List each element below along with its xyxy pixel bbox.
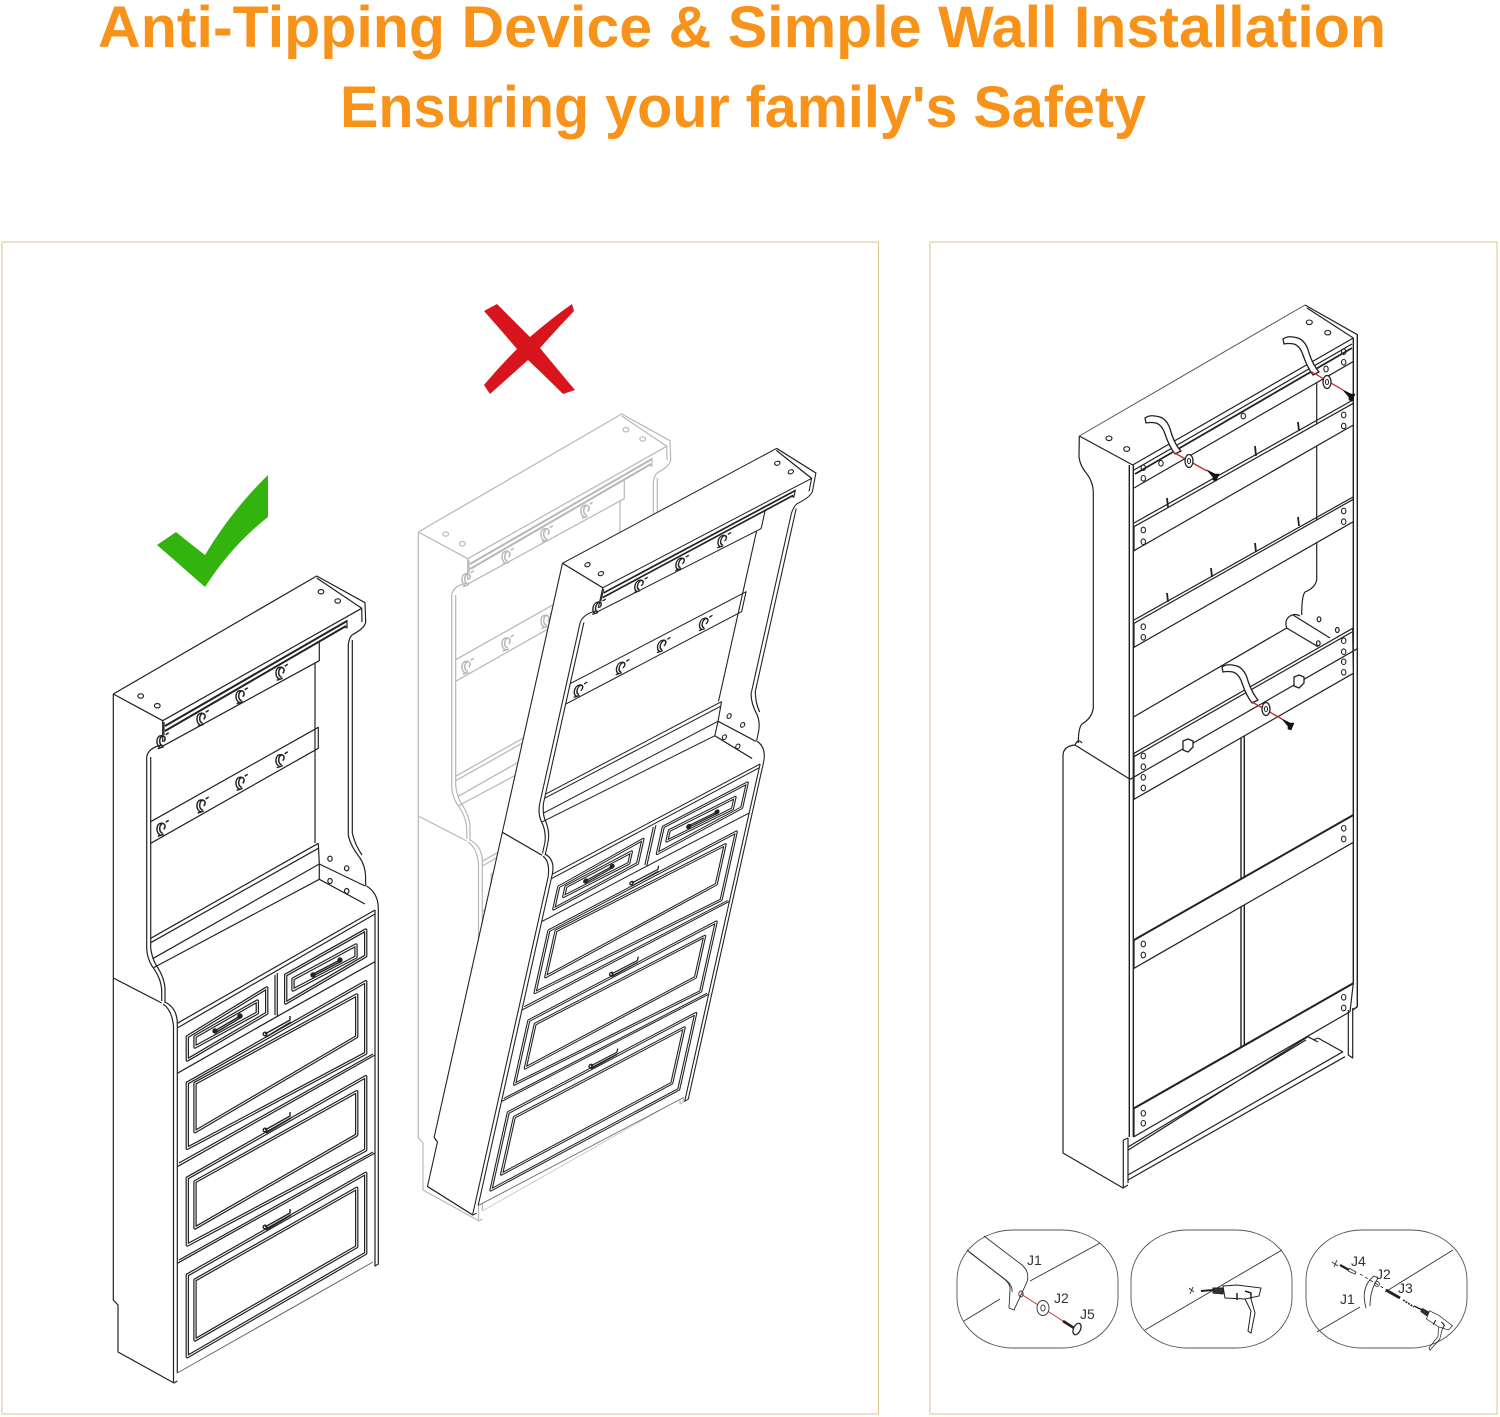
illustration: cabinet rear view with anti-tip brackets — [1063, 305, 1358, 1188]
detail: inserting wall anchor J1 J2 J3 J4: J2 — [1376, 1266, 1391, 1282]
detail: bracket attachment with J1 J2 J5 — [957, 1230, 1118, 1348]
title: Ensuring your family's Safety — [340, 75, 1146, 140]
detail: bracket attachment with J1 J2 J5: J2 — [1054, 1290, 1069, 1306]
icon: red cross mark — [484, 304, 575, 394]
illustration: ghost cabinet in original upright position — [418, 414, 683, 1221]
detail: inserting wall anchor J1 J2 J3 J4: J3 — [1398, 1280, 1413, 1296]
detail: bracket attachment with J1 J2 J5: J5 — [1080, 1306, 1095, 1322]
title — [98, 0, 1386, 140]
illustration: tipping cabinet — [416, 448, 834, 1216]
detail: inserting wall anchor J1 J2 J3 J4: J4 — [1351, 1253, 1366, 1269]
icon: green check mark — [157, 475, 268, 587]
detail: inserting wall anchor J1 J2 J3 J4 — [1306, 1230, 1467, 1354]
detail: inserting wall anchor J1 J2 J3 J4: J1 — [1340, 1291, 1355, 1307]
detail: bracket attachment with J1 J2 J5: J1 — [1027, 1252, 1042, 1268]
panel: correct installation frame — [2, 242, 878, 1414]
panel: wall installation frame — [930, 242, 1497, 1414]
illustration: upright secured cabinet — [113, 576, 378, 1383]
detail: drilling pilot hole — [1131, 1230, 1292, 1348]
